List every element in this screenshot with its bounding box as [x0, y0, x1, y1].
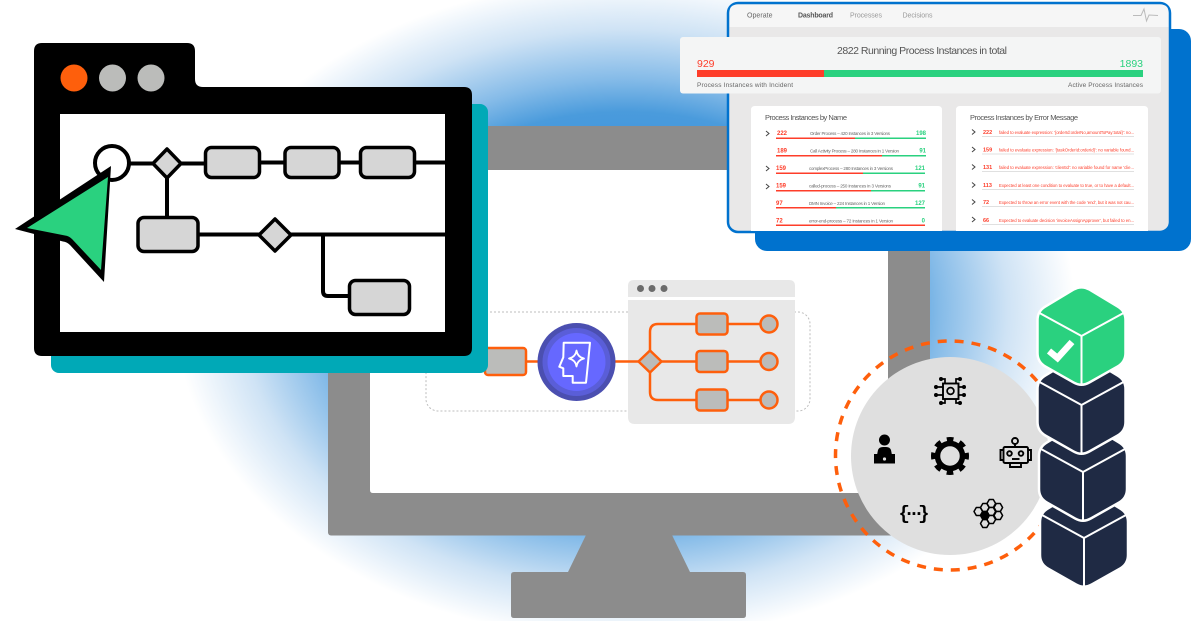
monitor — [328, 126, 930, 618]
row: called-process: 91 — [918, 184, 926, 190]
row: error 159 — [972, 147, 1134, 154]
orange connectors — [526, 324, 760, 400]
AI agent circle — [538, 323, 616, 401]
app window panel — [628, 280, 795, 424]
card: process instances by error message — [956, 106, 1148, 231]
tasks — [696, 314, 728, 410]
green cursor arrow — [15, 166, 111, 282]
row: DMN Invoice: 127 — [915, 201, 926, 207]
icon: honeycomb — [974, 500, 1003, 528]
monitor frame — [328, 126, 930, 536]
black window — [34, 43, 472, 356]
nav bar: Operate — [747, 12, 773, 20]
row: error 113: Expected at least one condition to evaluate to true, or to have a default... — [999, 183, 1134, 188]
row: called-process — [766, 184, 926, 192]
row: error 131 — [972, 164, 1134, 172]
row: error 72: Expected to throw an error event with the code 'end', but it was not cau... — [999, 200, 1134, 205]
row: error 72: 72 — [983, 200, 989, 206]
icon: gear — [934, 440, 966, 472]
teal shadow panel — [51, 104, 488, 373]
row: error 72 — [972, 200, 1134, 207]
white canvas — [60, 114, 445, 332]
row: called-process: 159 — [776, 184, 787, 190]
window buttons — [60, 64, 164, 92]
card: process instances by name — [751, 106, 942, 231]
Operate dashboard — [680, 3, 1191, 251]
stack of cubes — [1038, 287, 1128, 587]
gateway — [638, 350, 662, 372]
row: DMN Invoice: DMN Invoice – 224 Instances in 1 Version — [809, 201, 885, 206]
nav bar: Processes — [850, 12, 882, 20]
row: error 131: 131 — [983, 165, 992, 171]
row: DMN Invoice: 97 — [776, 201, 783, 207]
row: complexProcess: 121 — [915, 166, 926, 172]
connectors — [130, 162, 445, 296]
dotted boundary — [426, 312, 810, 411]
cube: third — [1039, 423, 1127, 521]
row: error 159: 159 — [983, 148, 992, 154]
process diagram — [95, 146, 445, 314]
nav bar: Dashboard — [798, 12, 833, 20]
totals panel: 1893 — [1120, 58, 1143, 70]
totals panel — [680, 37, 1161, 94]
dashboard window — [728, 3, 1170, 232]
row: complexProcess — [766, 166, 926, 174]
row: Call Activity Process: 91 — [919, 148, 927, 154]
totals panel: Process Instances with Incident — [697, 82, 793, 89]
row: Call Activity Process: 189 — [777, 148, 788, 154]
row: error 131: failed to evaluate expression: 'clientId': no variable found for name 'clie... — [999, 165, 1134, 170]
end events — [760, 316, 778, 408]
row: Order Process — [766, 131, 927, 139]
totals panel: 2822 Running Process Instances in total — [837, 45, 1007, 57]
start event — [95, 146, 129, 180]
cube: bottom — [1040, 489, 1128, 587]
icon: person at laptop — [874, 434, 895, 464]
blue back panel — [755, 29, 1191, 251]
row: error 222: 222 — [983, 130, 992, 136]
cube: second — [1038, 356, 1126, 454]
cube: green with check mark — [1038, 287, 1126, 385]
dashed orange ring — [836, 341, 1064, 570]
row: error 66: 66 — [983, 218, 989, 224]
input task — [485, 348, 526, 375]
row: called-process: called-process – 250 Instances in 3 Versions — [809, 184, 892, 188]
gateway one — [153, 149, 181, 178]
row: error-end-process: 72 — [776, 218, 783, 224]
row: error-end-process — [776, 218, 926, 226]
orchestration circle — [836, 341, 1064, 570]
monitor screen — [370, 170, 888, 493]
card: process instances by name: Process Instances by Name — [765, 113, 847, 122]
gateway two — [259, 219, 291, 251]
row: error 222: failed to evaluate expression: '{orderId:orderNo,amountToPay:total}': no... — [999, 130, 1134, 135]
icon: robot — [1000, 438, 1031, 467]
icon: chip — [934, 377, 966, 405]
BPMN modeler window — [15, 43, 488, 373]
nav bar — [730, 4, 1168, 27]
row: Order Process: 198 — [916, 131, 927, 137]
row: Order Process: 222 — [777, 131, 788, 137]
row: error 113: 113 — [983, 183, 992, 189]
row: error-end-process: 0 — [922, 218, 926, 224]
totals panel: 929 — [697, 58, 715, 70]
row: error-end-process: error-end-process – 72 Instances in 1 Version — [809, 218, 893, 224]
card: process instances by error message: Process Instances by Error Message — [970, 113, 1078, 122]
icon: code braces: {···} — [898, 503, 930, 525]
row: error 159: failed to evaluate expression: '{taskOrderId:orderId}': no variable found... — [999, 148, 1134, 152]
tasks — [138, 148, 414, 314]
row: Call Activity Process: Call Activity Process – 280 Instances in 1 Version — [810, 148, 899, 154]
row: error 66: Expected to evaluate decision 'invoiceAssignApprover', but failed to en... — [999, 218, 1134, 223]
row: Call Activity Process — [776, 148, 927, 156]
monitor stand — [511, 535, 746, 618]
row: error 66 — [972, 217, 1134, 225]
row: complexProcess: 159 — [776, 166, 787, 172]
row: Order Process: Order Process – 420 Instances in 3 Versions — [810, 131, 891, 136]
grey disc — [851, 357, 1049, 555]
AI process flow on the screen — [426, 280, 810, 424]
totals panel: Active Process Instances — [1068, 82, 1144, 89]
row: complexProcess: complexProcess – 280 Instances in 3 Versions — [809, 166, 894, 171]
nav bar: Decisions — [902, 12, 933, 20]
row: error 222 — [972, 130, 1134, 137]
row: DMN Invoice — [776, 201, 926, 208]
row: error 113 — [972, 182, 1134, 190]
